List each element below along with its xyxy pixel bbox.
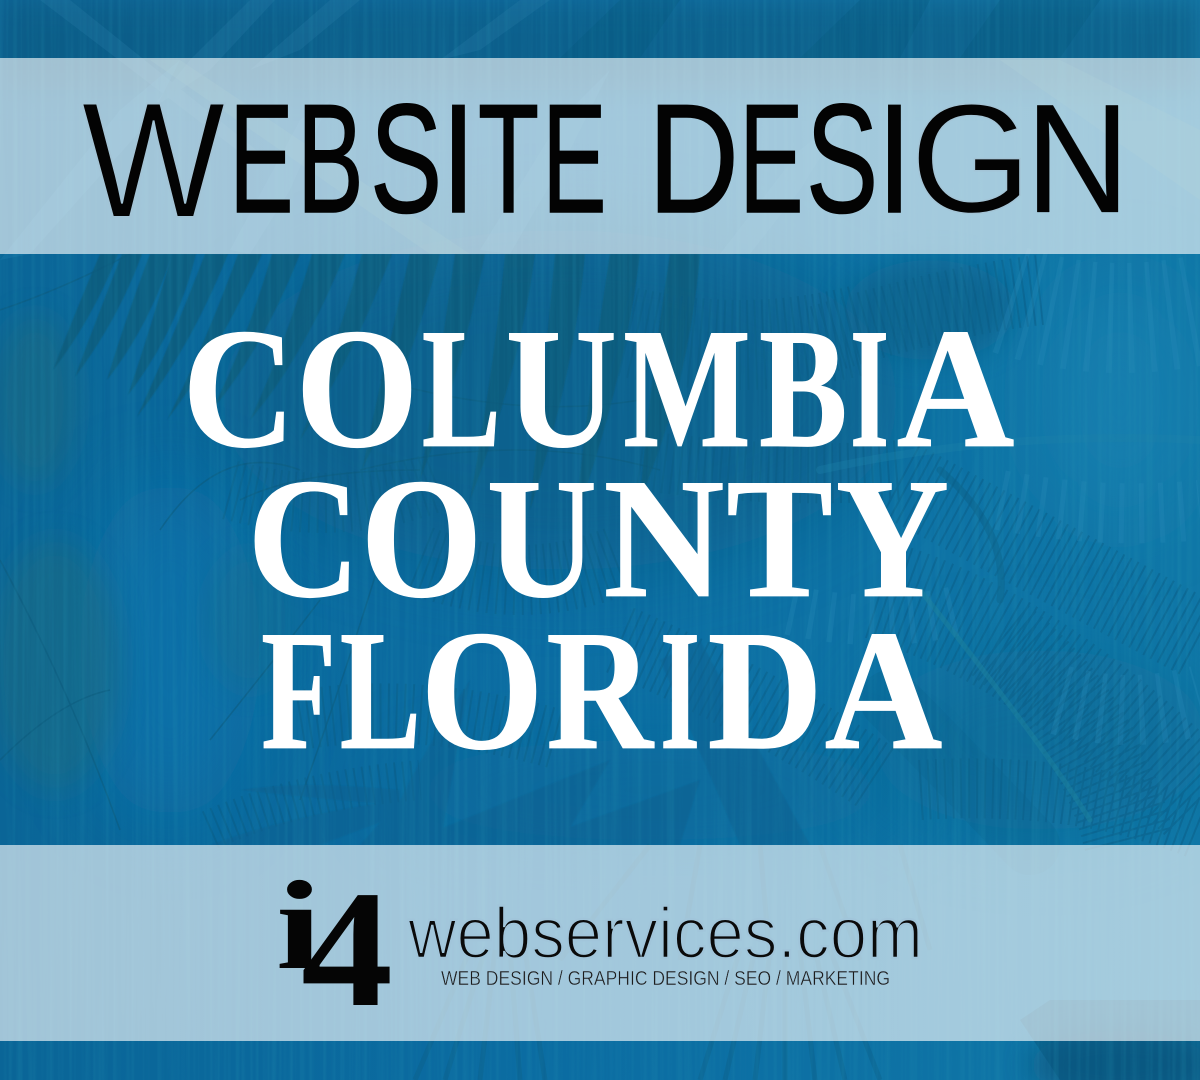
main title: location: U — [486, 444, 597, 634]
thin branches — [0, 254, 660, 830]
main title: location: F — [261, 596, 336, 786]
heading: website design: E — [542, 72, 606, 245]
palm frond leaflets — [210, 290, 1200, 845]
heading: website design: E — [739, 72, 804, 245]
main title: location: I — [660, 596, 700, 786]
main title: location: R — [546, 596, 655, 786]
main title: location: B — [759, 294, 848, 484]
top banner — [0, 58, 1200, 254]
main title: location: A — [896, 294, 1014, 484]
heading: website design: G — [910, 72, 1032, 245]
logo wordmark: webservices.com — [407, 894, 923, 974]
main title: location: N — [603, 444, 724, 634]
heading: website design: S — [370, 72, 442, 245]
main title: location: U — [506, 294, 617, 484]
bottom strip palm — [415, 845, 930, 1080]
main title: location: D — [707, 596, 823, 786]
main title: location: O — [296, 294, 419, 484]
main title: location: C — [182, 294, 296, 484]
main title: location: C — [247, 444, 360, 634]
main title: location: Y — [836, 444, 949, 634]
main title: location — [182, 294, 1015, 786]
heading: website design: D — [648, 72, 739, 245]
main title: location: M — [623, 294, 751, 484]
main title: location: A — [824, 596, 942, 786]
hanging palm blades — [53, 254, 700, 520]
top strip and banner fronds — [0, 0, 1200, 260]
main title: location: L — [422, 294, 501, 484]
foliage at far left — [0, 315, 295, 790]
lower palm fan — [210, 640, 810, 845]
logo mark: i4: i — [276, 856, 322, 996]
heading: website design: E — [229, 72, 294, 245]
heading: website design: S — [806, 72, 878, 245]
bottom banner — [0, 845, 1200, 1042]
heading: website design: W — [82, 68, 226, 252]
main title: location: I — [850, 294, 889, 484]
main title: location: T — [726, 444, 833, 634]
heading: website design: N — [1025, 72, 1130, 245]
logo tagline: WEB DESIGN / GRAPHIC DESIGN / SEO / MARKETING — [441, 967, 890, 990]
large frond stems — [820, 438, 1200, 845]
heading: website design: T — [478, 72, 539, 245]
logo mark: i4: 4 — [301, 857, 393, 1042]
main title: location: O — [420, 596, 544, 786]
main title: location: L — [340, 596, 421, 786]
heading: website design: I — [877, 72, 912, 245]
heading: website design: I — [441, 72, 476, 245]
heading: website design: B — [297, 72, 364, 245]
main title: location: O — [360, 444, 482, 634]
